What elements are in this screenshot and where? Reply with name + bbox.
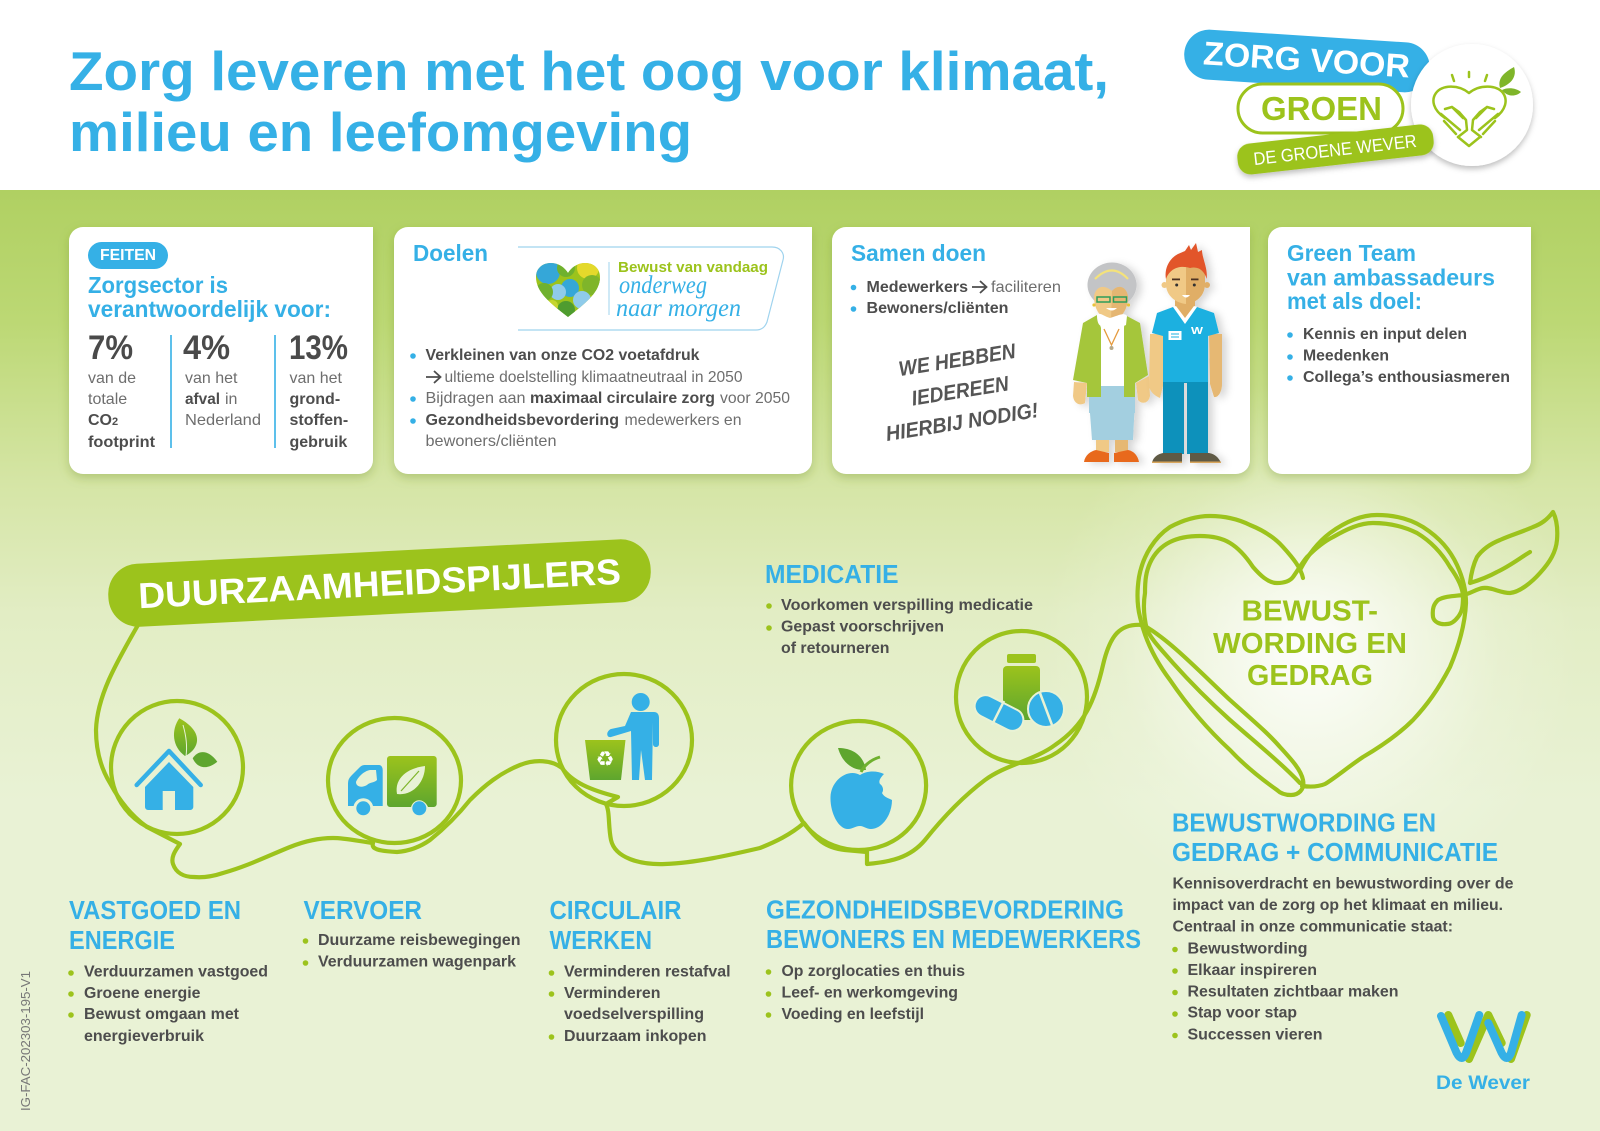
fact: 4%: [183, 329, 261, 429]
fact: 13%: van het: [290, 370, 343, 387]
pillar circle: circulair werken: [556, 674, 692, 806]
text block: bewustwording en communicatie: Elkaar inspireren: [1188, 962, 1317, 979]
feiten badge: [88, 242, 168, 269]
heart text: GEDRAG: [1247, 660, 1373, 692]
panel: samen doen: [832, 227, 1250, 474]
fact: 13%: stoffen-: [290, 412, 348, 429]
doelen list: ultieme doelstelling klimaatneutraal in 2050: [444, 369, 743, 386]
badge: bewust van vandaag: [518, 247, 783, 330]
fact: 4%: in: [225, 391, 237, 408]
badge: bewust van vandaag: naar morgen: [616, 295, 741, 322]
illustration: resident woman: [1073, 262, 1150, 462]
text block: gezondheidsbevordering: Leef- en werkomgeving: [782, 984, 958, 1002]
title: milieu en leefomgeving: [69, 101, 692, 163]
feiten badge: FEITEN: [100, 247, 156, 264]
text block: medicatie: Gepast voorschrijven: [781, 618, 944, 636]
text block: gezondheidsbevordering: Op zorglocaties en thuis: [782, 963, 965, 980]
text block: circulair werken: WERKEN: [550, 927, 652, 955]
fact: 7%: footprint: [88, 434, 156, 451]
text block: bewustwording en communicatie: impact van de zorg op het klimaat en milieu.: [1172, 897, 1503, 914]
doelen list: medewerkers en: [624, 412, 742, 429]
handwritten quote: HIERBIJ NODIG!: [884, 399, 1040, 446]
feiten heading: verantwoordelijk voor:: [88, 296, 331, 322]
text block: medicatie: [765, 561, 1033, 657]
text block: circulair werken: Duurzaam inkopen: [564, 1028, 706, 1045]
fact: 4%: Nederland: [185, 412, 261, 429]
pillar circle: vastgoed en energie: [111, 701, 243, 834]
badge: bewust van vandaag: onderweg: [619, 272, 707, 299]
text block: vastgoed en energie: Verduurzamen vastgoed: [84, 964, 268, 980]
text block: bewustwording en communicatie: Successen vieren: [1188, 1026, 1322, 1044]
connecting line: [96, 512, 1557, 877]
text block: circulair werken: [549, 897, 730, 1045]
feiten heading: [88, 272, 331, 322]
text block: medicatie: MEDICATIE: [765, 561, 898, 589]
document code: IG-FAC-202303-195-V1: [18, 971, 33, 1111]
icon: medicine bottle and pills: [971, 654, 1064, 735]
doelen list: Bijdragen aan: [426, 390, 526, 407]
text block: circulair werken: Verminderen: [564, 985, 660, 1002]
fact: 7%: [88, 329, 156, 451]
heart inner line and leaf: [1144, 512, 1557, 783]
panel: feiten: [69, 227, 373, 474]
text block: vastgoed en energie: Bewust omgaan met: [84, 1006, 240, 1023]
fact: 13%: [289, 329, 348, 451]
doelen heading: Doelen: [413, 240, 488, 266]
banner: duurzaamheidspijlers: DUURZAAMHEIDSPIJLERS: [137, 551, 622, 616]
pillar circle: gezondheidsbevordering: [791, 721, 926, 850]
samen doen heading: Samen doen: [851, 240, 986, 266]
heart text: WORDING EN: [1213, 628, 1407, 660]
logo: De Wever: De Wever: [1436, 1073, 1531, 1094]
text block: bewustwording en communicatie: Kennisoverdracht en bewustwording over de: [1172, 876, 1514, 892]
icon: person at recycling bin: ♻: [596, 747, 614, 771]
fact: 7%: 7%: [88, 329, 133, 367]
pillar circle: medicatie: [956, 631, 1087, 763]
doelen list: [410, 347, 790, 450]
text block: circulair werken: Verminderen restafval: [564, 964, 730, 980]
logo: Zorg voor groen: [1183, 28, 1533, 176]
icon: mosaic heart: [536, 263, 600, 317]
fact: 13%: gebruik: [290, 434, 347, 451]
text block: vastgoed en energie: Groene energie: [84, 985, 201, 1002]
heart text: [1213, 596, 1407, 692]
green team heading: Green Team: [1287, 240, 1416, 266]
text block: vastgoed en energie: ENERGIE: [69, 927, 175, 955]
pillar circle: vervoer: [328, 718, 461, 843]
text block: bewustwording en communicatie: Centraal in onze communicatie staat:: [1172, 918, 1453, 936]
fact: 7%: van de: [88, 370, 136, 387]
title: [69, 40, 1109, 163]
text block: vervoer: VERVOER: [304, 897, 422, 925]
samen doen list: Bewoners/cliënten: [866, 300, 1008, 317]
text block: medicatie: of retourneren: [781, 640, 890, 657]
green team heading: [1287, 240, 1495, 314]
logo blue pill: ZORG VOOR: [1202, 34, 1411, 85]
logo white pill: Groen: [1238, 84, 1403, 133]
green team heading: met als doel:: [1287, 288, 1422, 314]
text block: bewustwording en communicatie: Resultaten zichtbaar maken: [1188, 984, 1398, 1000]
text block: bewustwording en communicatie: Bewustwording: [1188, 940, 1308, 958]
panel: green team: [1268, 227, 1531, 474]
green team list: Collega’s enthousiasmeren: [1303, 369, 1510, 386]
green team heading: van ambassadeurs: [1287, 264, 1495, 290]
feiten heading: Zorgsector is: [88, 272, 228, 298]
title: Zorg leveren met het oog voor klimaat,: [69, 40, 1109, 102]
doelen list: voor 2050: [720, 390, 790, 407]
heart text: BEWUST-: [1242, 596, 1378, 628]
fact: 4%: van het: [185, 370, 238, 387]
text block: gezondheidsbevordering: Voeding en leefstijl: [782, 1006, 924, 1023]
icon: bitten apple: [830, 748, 892, 829]
logo green pill: [1236, 123, 1435, 176]
green team list: Kennis en input delen: [1303, 326, 1467, 343]
text block: bewustwording en communicatie: BEWUSTWORDING EN: [1172, 810, 1436, 838]
green team list: [1287, 326, 1510, 386]
doelen list: Verkleinen van onze CO2 voetafdruk: [426, 347, 700, 364]
doelen list: bewoners/cliënten: [426, 433, 556, 450]
logo: De Wever: [1436, 1015, 1531, 1094]
samen doen list: faciliteren: [991, 279, 1061, 296]
samen doen list: [851, 279, 1061, 317]
logo green pill: DE GROENE WEVER: [1252, 131, 1418, 169]
text block: vastgoed en energie: VASTGOED EN: [69, 897, 241, 925]
text block: vastgoed en energie: [68, 897, 268, 1045]
handwritten quote: IEDEREEN: [910, 372, 1011, 411]
text block: vervoer: [303, 897, 520, 970]
text block: bewustwording en communicatie: [1172, 810, 1514, 1044]
text block: medicatie: Voorkomen verspilling medicatie: [781, 597, 1033, 614]
icon: house with leaves: [137, 718, 217, 810]
fact: 7%: CO2: [88, 412, 118, 429]
logo white pill: Groen: GROEN: [1261, 90, 1382, 127]
handwritten quote: [884, 340, 1040, 446]
badge: bewust van vandaag: Bewust van vandaag: [618, 259, 768, 276]
text block: vastgoed en energie: energieverbruik: [84, 1028, 204, 1045]
text block: gezondheidsbevordering: BEWONERS EN MEDEWERKERS: [766, 926, 1141, 954]
green team list: Meedenken: [1303, 348, 1389, 364]
illustration: care worker man: [1149, 243, 1222, 463]
logo blue pill: [1183, 28, 1431, 94]
handwritten quote: WE HEBBEN: [897, 340, 1018, 381]
text block: vervoer: Duurzame reisbewegingen: [318, 932, 520, 949]
text block: bewustwording en communicatie: GEDRAG + COMMUNICATIE: [1172, 839, 1498, 867]
panel: doelen: [394, 227, 812, 474]
fact: 4%: afval: [185, 391, 220, 408]
text block: gezondheidsbevordering: GEZONDHEIDSBEVORDERING: [766, 896, 1124, 924]
banner: duurzaamheidspijlers: [107, 538, 652, 628]
fact: 4%: 4%: [183, 329, 230, 367]
text block: circulair werken: voedselverspilling: [564, 1006, 704, 1023]
text block: bewustwording en communicatie: Stap voor stap: [1188, 1004, 1297, 1022]
doelen list: Gezondheidsbevordering: [426, 412, 619, 429]
doelen list: maximaal circulaire zorg: [530, 390, 715, 407]
fact: 7%: totale: [88, 391, 127, 408]
text block: circulair werken: CIRCULAIR: [550, 897, 682, 925]
logo circle with heart icon: [1411, 44, 1533, 166]
icon: truck with leaf: [348, 756, 437, 818]
fact: 13%: grond-: [290, 391, 340, 408]
fact: 13%: 13%: [289, 329, 348, 367]
text block: gezondheidsbevordering: [766, 896, 1141, 1023]
samen doen list: Medewerkers: [866, 279, 968, 296]
heart outline: [1138, 516, 1303, 795]
text block: vervoer: Verduurzamen wagenpark: [318, 954, 516, 970]
illustration: care worker man: W: [1191, 326, 1204, 337]
